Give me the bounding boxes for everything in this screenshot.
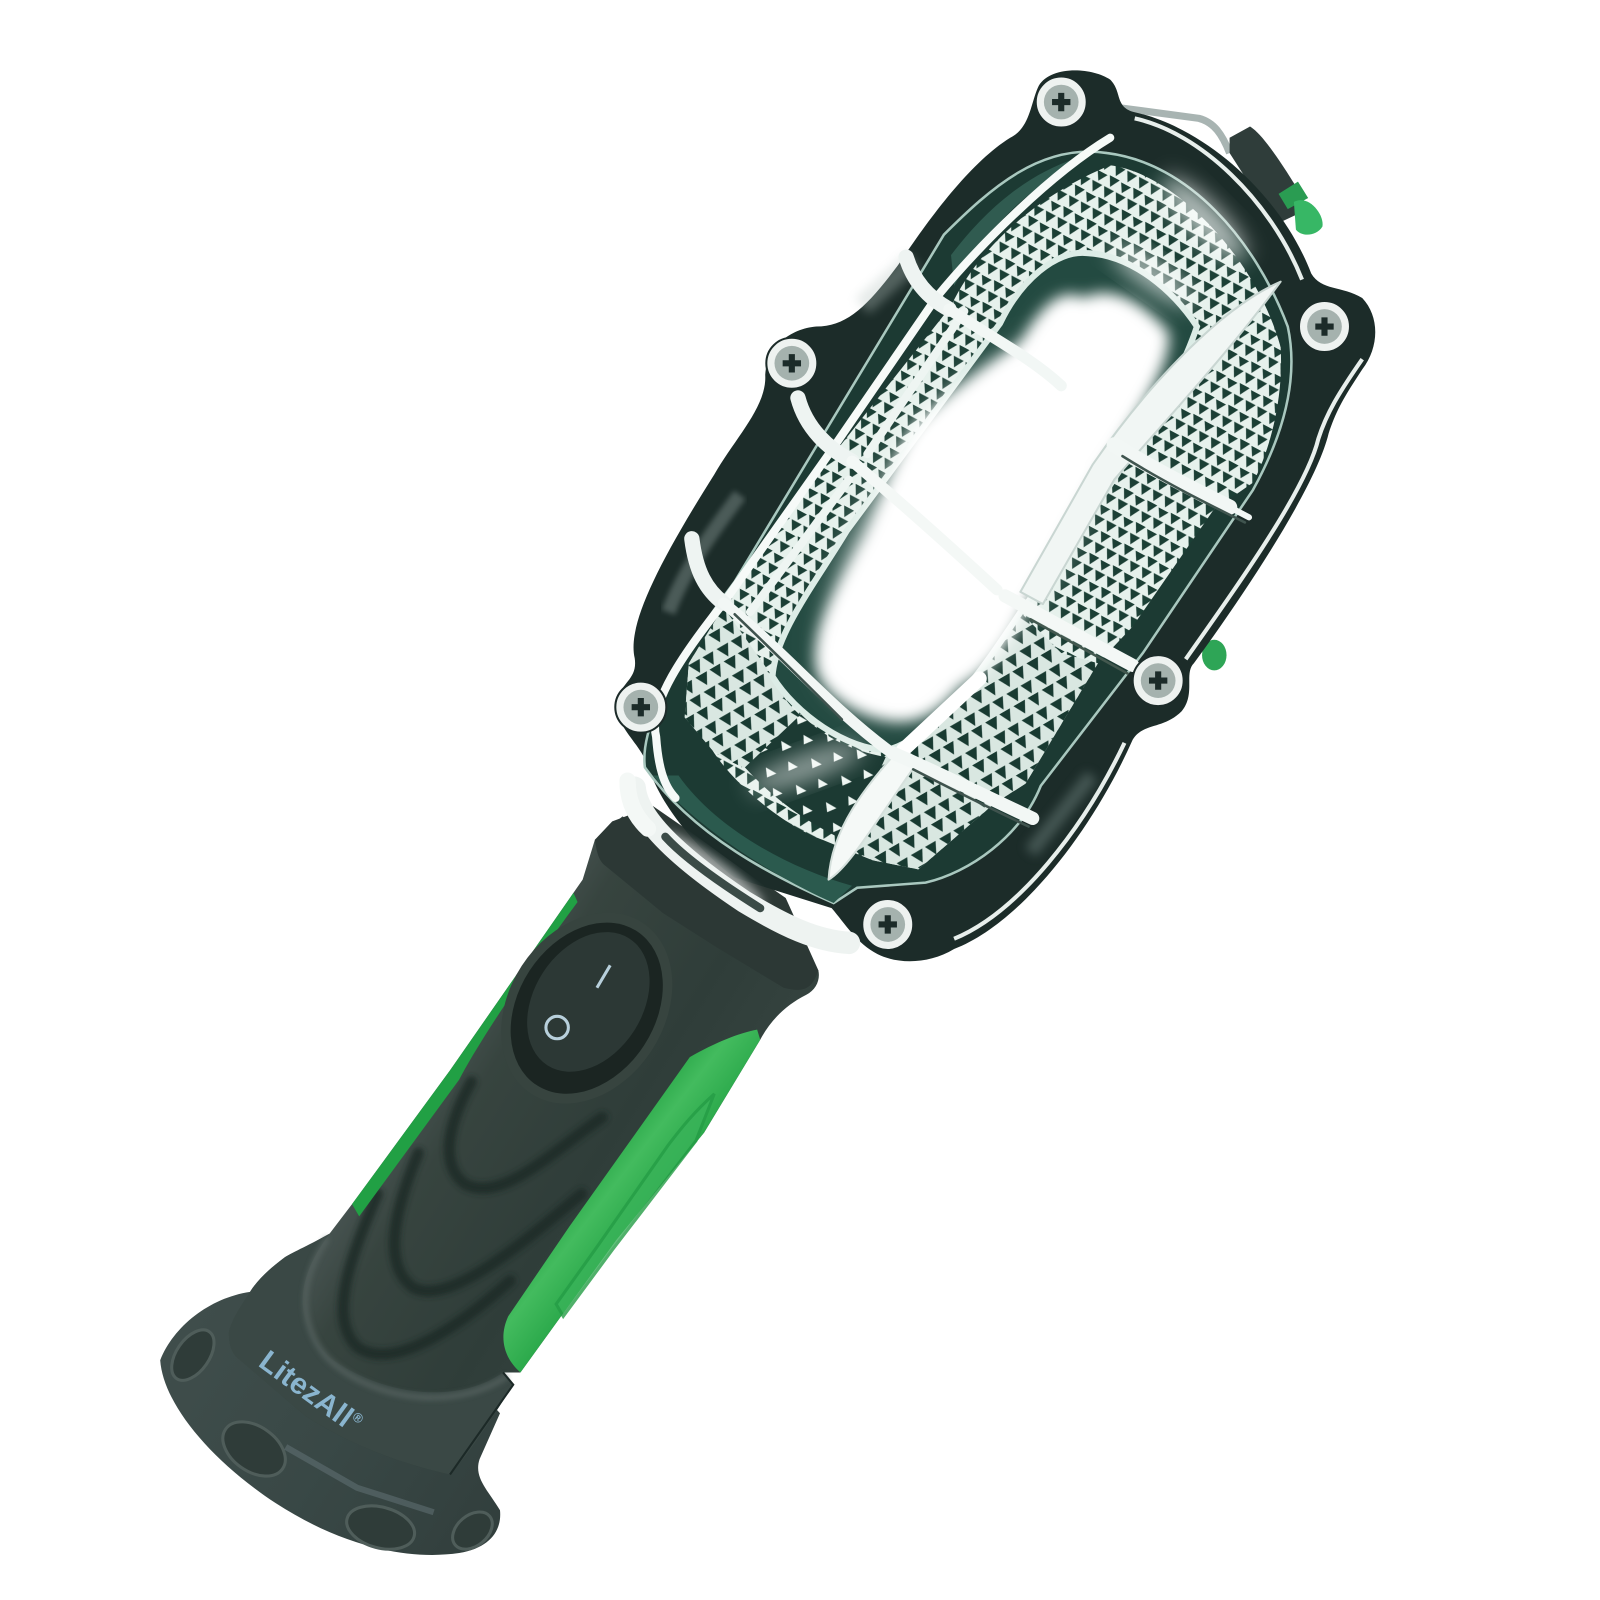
foot grip notches [163, 1322, 499, 1557]
screw: right [1299, 301, 1350, 352]
carry hook [1107, 106, 1323, 235]
screw: upper left [766, 338, 817, 389]
inner dome [772, 253, 1197, 750]
work light product [160, 70, 1375, 1557]
base shroud tint [229, 1234, 513, 1474]
screw: lower right [1133, 655, 1184, 706]
brand logo: LitezAll [253, 1344, 359, 1434]
sparse dot zone [745, 714, 886, 842]
seam [450, 1372, 513, 1474]
handle body [229, 816, 819, 1474]
screw: lower left [615, 682, 666, 733]
right long rib [829, 282, 1281, 880]
upper cross band [906, 257, 1249, 522]
switch symbols [546, 965, 610, 1039]
brand logo: ® [350, 1409, 367, 1427]
green side nub [1202, 640, 1227, 670]
middle cross band [798, 398, 1133, 673]
screw: bottom [862, 899, 913, 950]
rocker switch [466, 880, 707, 1136]
chrome collar [628, 781, 849, 943]
lower cross band [692, 539, 1033, 827]
green side strip [352, 893, 578, 1216]
reflector mesh [685, 165, 1281, 869]
green grip [503, 1030, 760, 1372]
handle wave contours [305, 1082, 602, 1398]
backplate [617, 70, 1375, 961]
screw: top [1036, 77, 1087, 128]
glass dome [644, 152, 1291, 903]
chrome cage ribs [655, 138, 1281, 880]
left long rib [655, 138, 1110, 798]
base foot [160, 1292, 500, 1557]
neck flange [595, 806, 818, 990]
lower mesh scales [847, 612, 1098, 869]
LED glow [659, 168, 1255, 914]
plate highlights [954, 118, 1362, 939]
